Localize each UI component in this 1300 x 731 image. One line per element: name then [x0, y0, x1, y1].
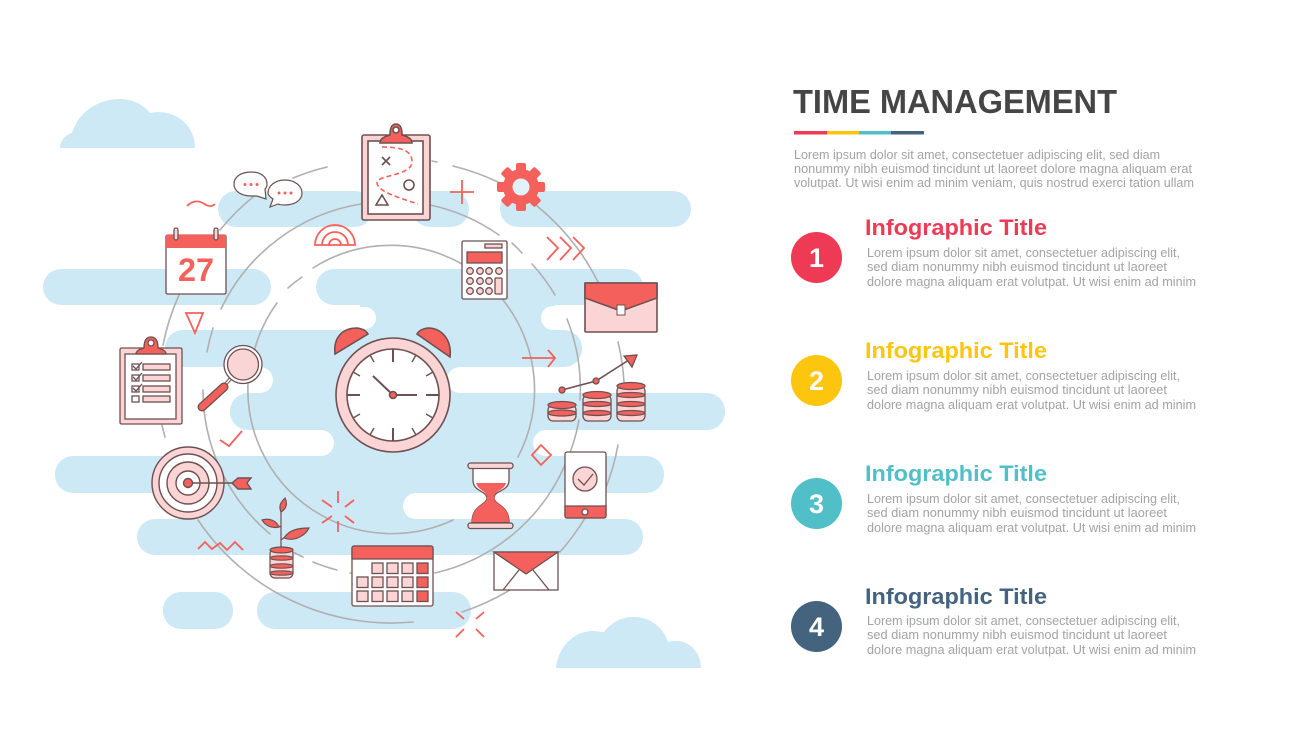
item 2: Infographic Title [865, 338, 1047, 363]
intro text [794, 148, 1194, 190]
item 4: dolore magna aliquam erat volutpat. Ut wisi enim ad minim [867, 643, 1196, 657]
icon: checklist clipboard [120, 337, 182, 424]
item 3 [791, 461, 1196, 535]
icon: envelope [494, 552, 558, 590]
icon: hourglass [468, 463, 513, 528]
item 1: dolore magna aliquam erat volutpat. Ut wisi enim ad minim [867, 275, 1196, 289]
icon: smartphone [565, 452, 606, 518]
icon: target with arrow [152, 447, 251, 519]
intro text: Lorem ipsum dolor sit amet, consectetuer adipiscing elit, sed diam [794, 148, 1160, 162]
item 1: 1 [809, 243, 824, 273]
title: TIME MANAGEMENT [793, 83, 1117, 120]
item 3: Infographic Title [865, 461, 1047, 486]
icon: calculator [462, 241, 507, 299]
item 1: Infographic Title [865, 215, 1047, 240]
item 4: Infographic Title [865, 584, 1047, 609]
item 1: sed diam nonummy nibh euismod tincidunt ut laoreet [867, 260, 1168, 274]
item 1: Lorem ipsum dolor sit amet, consectetuer adipiscing elit, [867, 246, 1180, 260]
icon: alarm clock [335, 328, 450, 452]
icon: plant on coins [262, 498, 309, 578]
icon: date calendar 27: 27 [178, 252, 214, 288]
item 2 [791, 338, 1196, 412]
icon: growth coins chart [548, 355, 645, 421]
icon: date calendar 27 [166, 228, 226, 294]
item 4: sed diam nonummy nibh euismod tincidunt ut laoreet [867, 628, 1168, 642]
intro text: nonummy nibh euismod tincidunt ut laoreet dolore magna aliquam erat [794, 162, 1193, 176]
icon: briefcase [585, 283, 657, 332]
item 2: Lorem ipsum dolor sit amet, consectetuer adipiscing elit, [867, 369, 1180, 383]
item 2: dolore magna aliquam erat volutpat. Ut wisi enim ad minim [867, 398, 1196, 412]
item 4 [791, 584, 1196, 657]
icon: chat bubbles [234, 172, 302, 207]
item 3: dolore magna aliquam erat volutpat. Ut wisi enim ad minim [867, 521, 1196, 535]
icon: gear [497, 163, 545, 211]
item 3: sed diam nonummy nibh euismod tincidunt ut laoreet [867, 506, 1168, 520]
item 2: 2 [809, 366, 824, 396]
decorative accents [186, 180, 584, 637]
intro text: volutpat. Ut wisi enim ad minim veniam, quis nostrud exerci tation ullam [794, 176, 1194, 190]
item 1 [791, 215, 1196, 289]
item 3: Lorem ipsum dolor sit amet, consectetuer adipiscing elit, [867, 492, 1180, 506]
icon: strategy clipboard [362, 124, 430, 220]
background: blue pills and clouds [43, 99, 725, 668]
item 4: Lorem ipsum dolor sit amet, consectetuer adipiscing elit, [867, 614, 1180, 628]
item 4: 4 [809, 612, 824, 642]
icon: magnifier [202, 346, 262, 407]
item 2: sed diam nonummy nibh euismod tincidunt ut laoreet [867, 383, 1168, 397]
item 3: 3 [809, 489, 824, 519]
icon: monthly calendar [352, 546, 433, 606]
concentric dashed ring arcs [162, 161, 624, 623]
title underline colour bar [794, 131, 924, 134]
